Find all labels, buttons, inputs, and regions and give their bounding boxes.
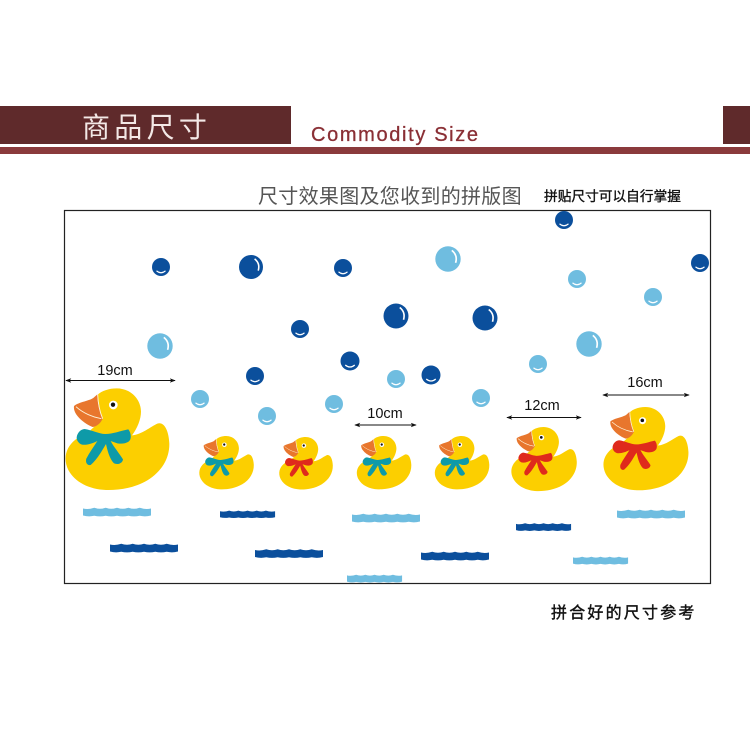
dimension 10cm: 10cm xyxy=(367,406,403,422)
dark waves xyxy=(110,511,571,560)
duck 19cm teal bow xyxy=(66,388,169,490)
dimension 12cm xyxy=(507,398,581,418)
light bubbles xyxy=(147,246,662,425)
subheading: 尺寸效果图及您收到的拼版图 xyxy=(258,185,522,208)
header right bar xyxy=(723,106,750,144)
note: 拼贴尺寸可以自行掌握 xyxy=(544,189,681,204)
header rule xyxy=(0,147,750,154)
dark bubbles xyxy=(152,211,709,385)
dimension 16cm xyxy=(603,375,689,395)
header band xyxy=(0,106,750,154)
duck 10cm teal bow xyxy=(357,436,411,489)
waves xyxy=(83,508,685,582)
dimension 19cm xyxy=(66,363,175,380)
duck 16cm red bow xyxy=(603,407,688,490)
duck 12cm red bow xyxy=(511,427,577,491)
light waves xyxy=(83,508,685,582)
title chinese: 商品尺寸 xyxy=(82,112,211,143)
footer caption: 拼合好的尺寸参考 xyxy=(551,604,697,622)
duck small red bow xyxy=(279,437,333,489)
dimension 10cm xyxy=(355,406,416,425)
duck small teal bow xyxy=(199,436,254,489)
dimension 16cm: 16cm xyxy=(627,375,663,391)
sticker frame xyxy=(64,210,710,584)
title english: Commodity Size xyxy=(311,124,480,146)
dimension 19cm: 19cm xyxy=(97,363,133,379)
duck small teal bow right xyxy=(435,436,489,489)
ducks xyxy=(66,388,688,491)
bubbles xyxy=(147,211,709,425)
header left bar xyxy=(0,106,291,144)
dimension 12cm: 12cm xyxy=(524,398,560,414)
